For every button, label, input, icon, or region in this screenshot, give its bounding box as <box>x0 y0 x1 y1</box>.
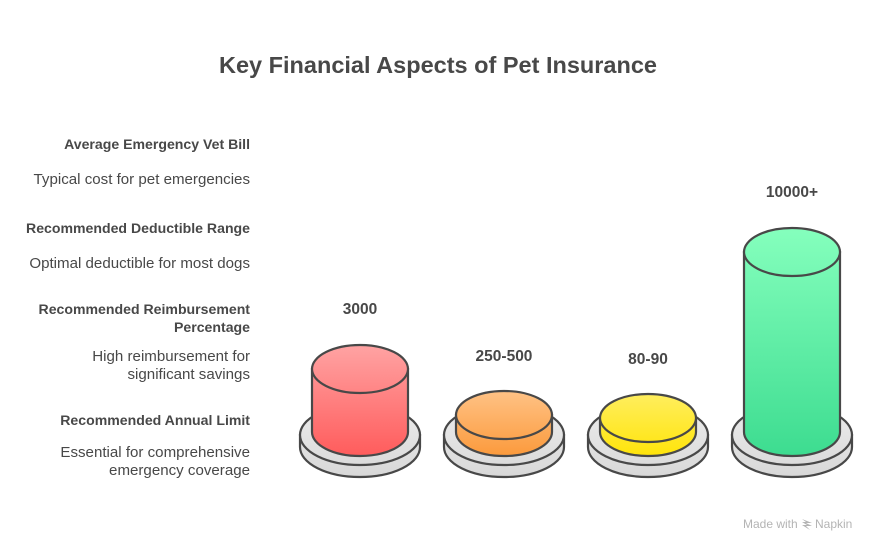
text block: high reimbursement: significant savings <box>128 366 250 383</box>
value label: 3000: 3000 <box>343 301 377 318</box>
column: 80-90 yellow <box>588 394 708 477</box>
column: 10000+ green <box>732 228 852 477</box>
text block: average emergency vet bill: Average Emergency Vet Bill <box>64 136 250 152</box>
text block: essential coverage: Essential for comprehensive <box>60 444 250 461</box>
text block: recommended reimbursement percentage: Recommended Reimbursement <box>39 301 250 317</box>
value label: 250-500: 250-500 <box>476 348 532 365</box>
watermark: made with napkin: Napkin <box>815 517 852 531</box>
value label: 10000+: 10000+ <box>766 184 818 201</box>
text block: recommended reimbursement percentage: Percentage <box>174 319 250 335</box>
column: 3000 red <box>300 345 420 477</box>
text block: recommended reimbursement percentage <box>39 301 250 335</box>
text block: recommended deductible range: Recommended Deductible Range <box>26 220 250 236</box>
watermark: made with napkin <box>743 517 852 531</box>
column: 250-500 orange <box>444 391 564 477</box>
text block: typical cost: Typical cost for pet emergencies <box>34 171 250 188</box>
text block: essential coverage: emergency coverage <box>109 462 250 479</box>
text block: recommended annual limit: Recommended Annual Limit <box>60 412 250 428</box>
value label: 80-90: 80-90 <box>628 351 668 368</box>
text block: high reimbursement <box>92 348 250 383</box>
watermark: made with napkin: Made with <box>743 517 798 531</box>
text block: high reimbursement: High reimbursement for <box>92 348 250 365</box>
text block: essential coverage <box>60 444 250 479</box>
text block: optimal deductible: Optimal deductible for most dogs <box>29 255 250 272</box>
title: Key Financial Aspects of Pet Insurance <box>219 52 657 78</box>
